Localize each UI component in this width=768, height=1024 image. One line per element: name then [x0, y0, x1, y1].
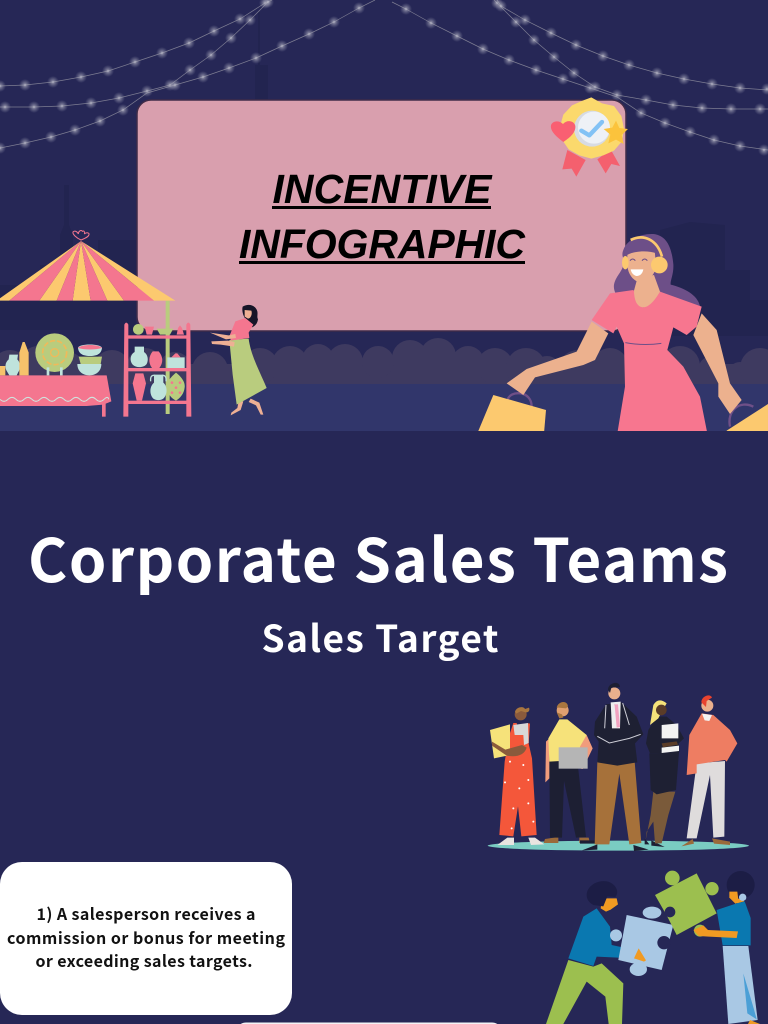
- teal ground ellipse: [488, 841, 749, 851]
- green puzzle piece: [655, 871, 719, 937]
- person in coral sweater: [681, 695, 737, 846]
- text panel: point 1: [0, 862, 292, 1015]
- next panel top edge: [238, 1022, 500, 1024]
- hair: [614, 234, 700, 306]
- pink dress: [592, 290, 707, 433]
- heading: corporate sales teams: Corporate Sales Teams: [28, 513, 728, 600]
- pottery shelf: [123, 323, 191, 417]
- illustration: two people joining puzzle pieces: [546, 871, 760, 1024]
- stall pole: [166, 301, 170, 414]
- bushes: [0, 338, 768, 390]
- left shopping bag: [477, 395, 546, 433]
- right person: [717, 871, 760, 1024]
- text panel: point 1: or exceeding sales targets.: [36, 948, 252, 972]
- illustration: team of five people: [488, 683, 749, 851]
- woman in dark skirt with papers: [645, 700, 684, 847]
- striped tent canopy: [0, 231, 175, 301]
- blue puzzle piece: [610, 907, 673, 976]
- icon: award badge: [551, 97, 628, 177]
- bag handles: [508, 393, 753, 427]
- right shopping bag: [727, 404, 768, 433]
- panel: pink title card: [137, 100, 626, 331]
- illustration: woman with shopping bags: [477, 234, 768, 433]
- face with headphones: [622, 237, 668, 282]
- illustration: market stall: [0, 231, 267, 417]
- person in orange overalls: [490, 707, 544, 845]
- heading: incentive infographic: INCENTIVE: [272, 166, 493, 212]
- man in yellow shirt with laptop: [544, 702, 593, 843]
- text panel: point 1: commission or bonus for meeting: [7, 925, 285, 949]
- woman in green skirt: [210, 305, 267, 415]
- heading: incentive infographic: [239, 166, 526, 267]
- left person: [546, 881, 635, 1024]
- heading: incentive infographic: INFOGRAPHIC: [239, 221, 526, 267]
- subheading: sales target: Sales Target: [262, 609, 498, 663]
- table with goods: [0, 333, 111, 417]
- tall man in dark suit: [580, 683, 649, 851]
- string lights: [0, 0, 768, 156]
- arms: [507, 313, 742, 414]
- hero scene background: [0, 12, 768, 431]
- text panel: point 1: 1) A salesperson receives a: [36, 901, 256, 925]
